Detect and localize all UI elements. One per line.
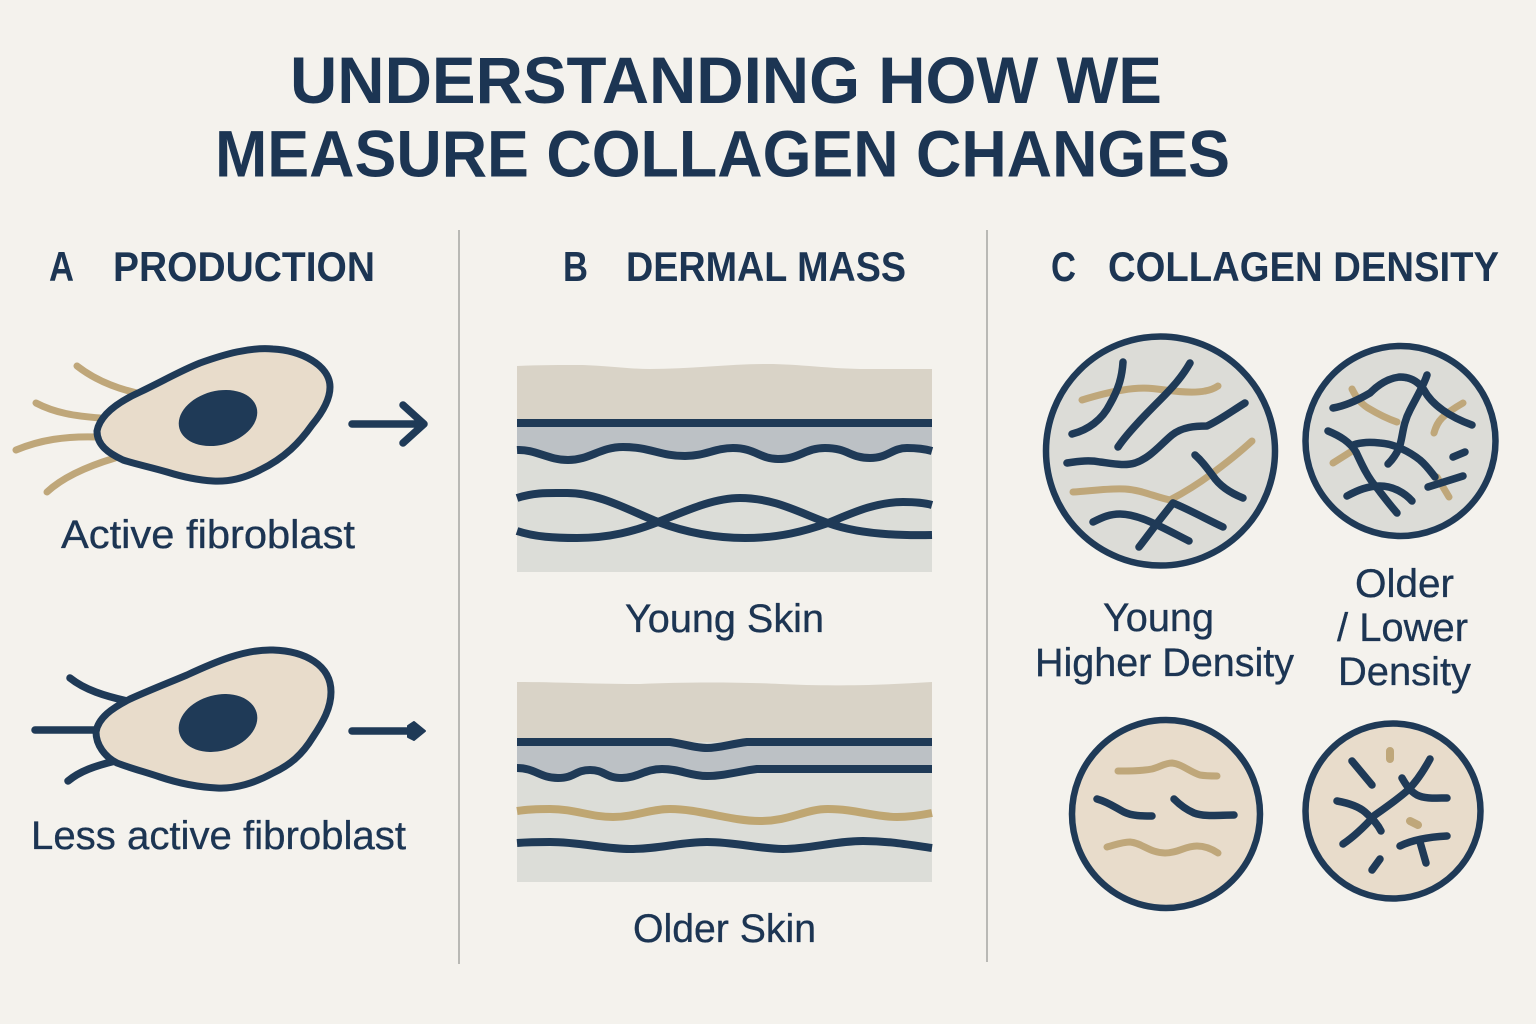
label: less active fibroblast: Less active fibroblast — [31, 814, 406, 858]
heading: A production: PRODUCTION — [113, 243, 375, 290]
heading: B dermal mass: B — [563, 243, 588, 290]
label: older lower density: Older — [1355, 562, 1454, 606]
label: young skin: Young Skin — [625, 597, 824, 641]
label: young higher density — [1035, 596, 1294, 685]
label: young higher density: Higher Density — [1035, 641, 1294, 685]
panel: A production — [16, 243, 425, 858]
circle: older fibers cross-section — [1306, 724, 1480, 898]
arrow: high production — [352, 405, 424, 443]
label: older lower density — [1337, 562, 1471, 694]
circle: older lower density fibers — [1306, 346, 1496, 536]
label: older skin: Older Skin — [633, 907, 816, 951]
heading: B dermal mass: DERMAL MASS — [626, 243, 906, 290]
label: older lower density: Density — [1338, 650, 1471, 694]
heading: A production: A — [49, 243, 74, 290]
diagram: young skin layers — [517, 364, 932, 572]
heading: C collagen density: COLLAGEN DENSITY — [1108, 243, 1499, 290]
circle: young fibers cross-section — [1072, 720, 1260, 908]
icon: less active fibroblast cell — [35, 650, 331, 788]
panel: B dermal mass — [517, 243, 932, 951]
icon: active fibroblast cell — [16, 349, 330, 492]
circle: young higher density fibers — [1046, 336, 1275, 566]
title — [215, 43, 1230, 190]
diagram: older skin layers — [517, 682, 932, 882]
title: MEASURE COLLAGEN CHANGES — [215, 116, 1230, 190]
label: older lower density: / Lower — [1337, 606, 1468, 650]
title: UNDERSTANDING HOW WE — [290, 43, 1162, 117]
arrow: low production — [352, 722, 425, 740]
heading: C collagen density: C — [1051, 243, 1076, 290]
panel: C collagen density — [1035, 243, 1499, 908]
label: active fibroblast: Active fibroblast — [61, 513, 355, 557]
label: young higher density: Young — [1103, 596, 1214, 640]
